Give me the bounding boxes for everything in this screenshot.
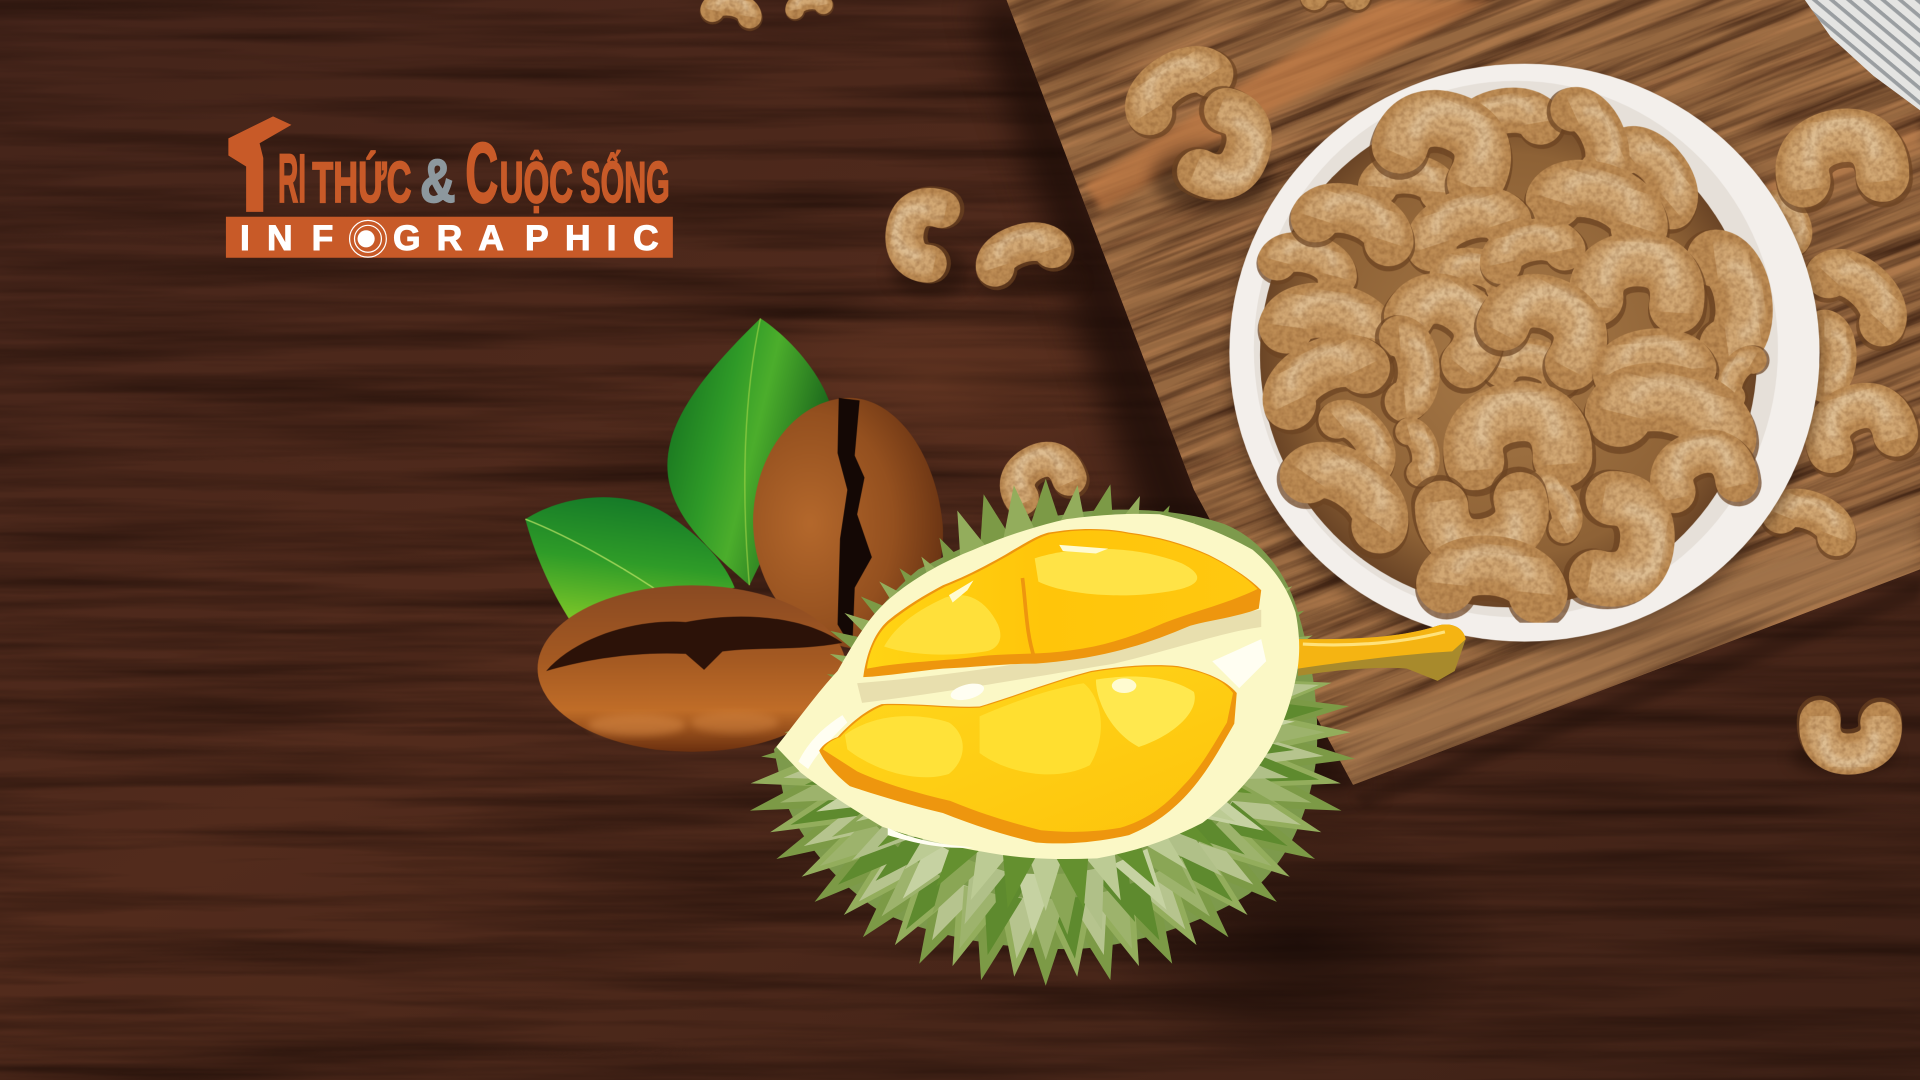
- logo wordmark: UỘC: [500, 150, 573, 215]
- lower durian pod: [819, 665, 1237, 843]
- durian spikes: [743, 479, 1357, 986]
- cashews in the bowl: [1275, 93, 1764, 597]
- striped towel: [1805, 0, 1920, 110]
- infographic banner: [226, 217, 673, 258]
- inner facets: [847, 739, 1265, 911]
- logo wordmark: C: [465, 125, 498, 221]
- outer facets: [779, 605, 1326, 960]
- cashews: [712, 0, 1903, 764]
- loose cashews around the board: [712, 0, 1903, 774]
- upper right dark spikes: [1119, 525, 1283, 637]
- upper green leaf: [667, 318, 830, 585]
- durian: [743, 479, 1466, 986]
- horizontal coffee bean: [538, 585, 846, 752]
- logo: Tri thức & Cuộc sống Infographic: [226, 116, 673, 258]
- coffee beans and leaves: [525, 318, 943, 752]
- left green leaf: [525, 497, 735, 623]
- durian shell body: [774, 510, 1317, 949]
- logo T mark: [228, 116, 291, 212]
- white bowl: [1228, 64, 1821, 650]
- logo wordmark: THỨC: [312, 151, 411, 215]
- middle facets: [800, 626, 1296, 935]
- infographic banner: GRAPHIC: [393, 218, 659, 258]
- gap shadow between pods: [857, 610, 1261, 703]
- durian stem: [1298, 625, 1466, 681]
- cashew shadows: [891, 143, 1894, 774]
- upper durian pod: [863, 529, 1261, 677]
- logo wordmark: SỐNG: [580, 150, 670, 215]
- infographic banner: INF: [240, 218, 333, 258]
- upright coffee bean: [753, 398, 943, 649]
- white highlights on husk: [798, 639, 1266, 848]
- logo wordmark: &: [420, 147, 456, 215]
- logo wordmark: RI: [278, 140, 306, 217]
- cream durian husk: [776, 514, 1299, 859]
- wooden cutting board: [992, 0, 1920, 808]
- logo wordmark: [278, 125, 670, 221]
